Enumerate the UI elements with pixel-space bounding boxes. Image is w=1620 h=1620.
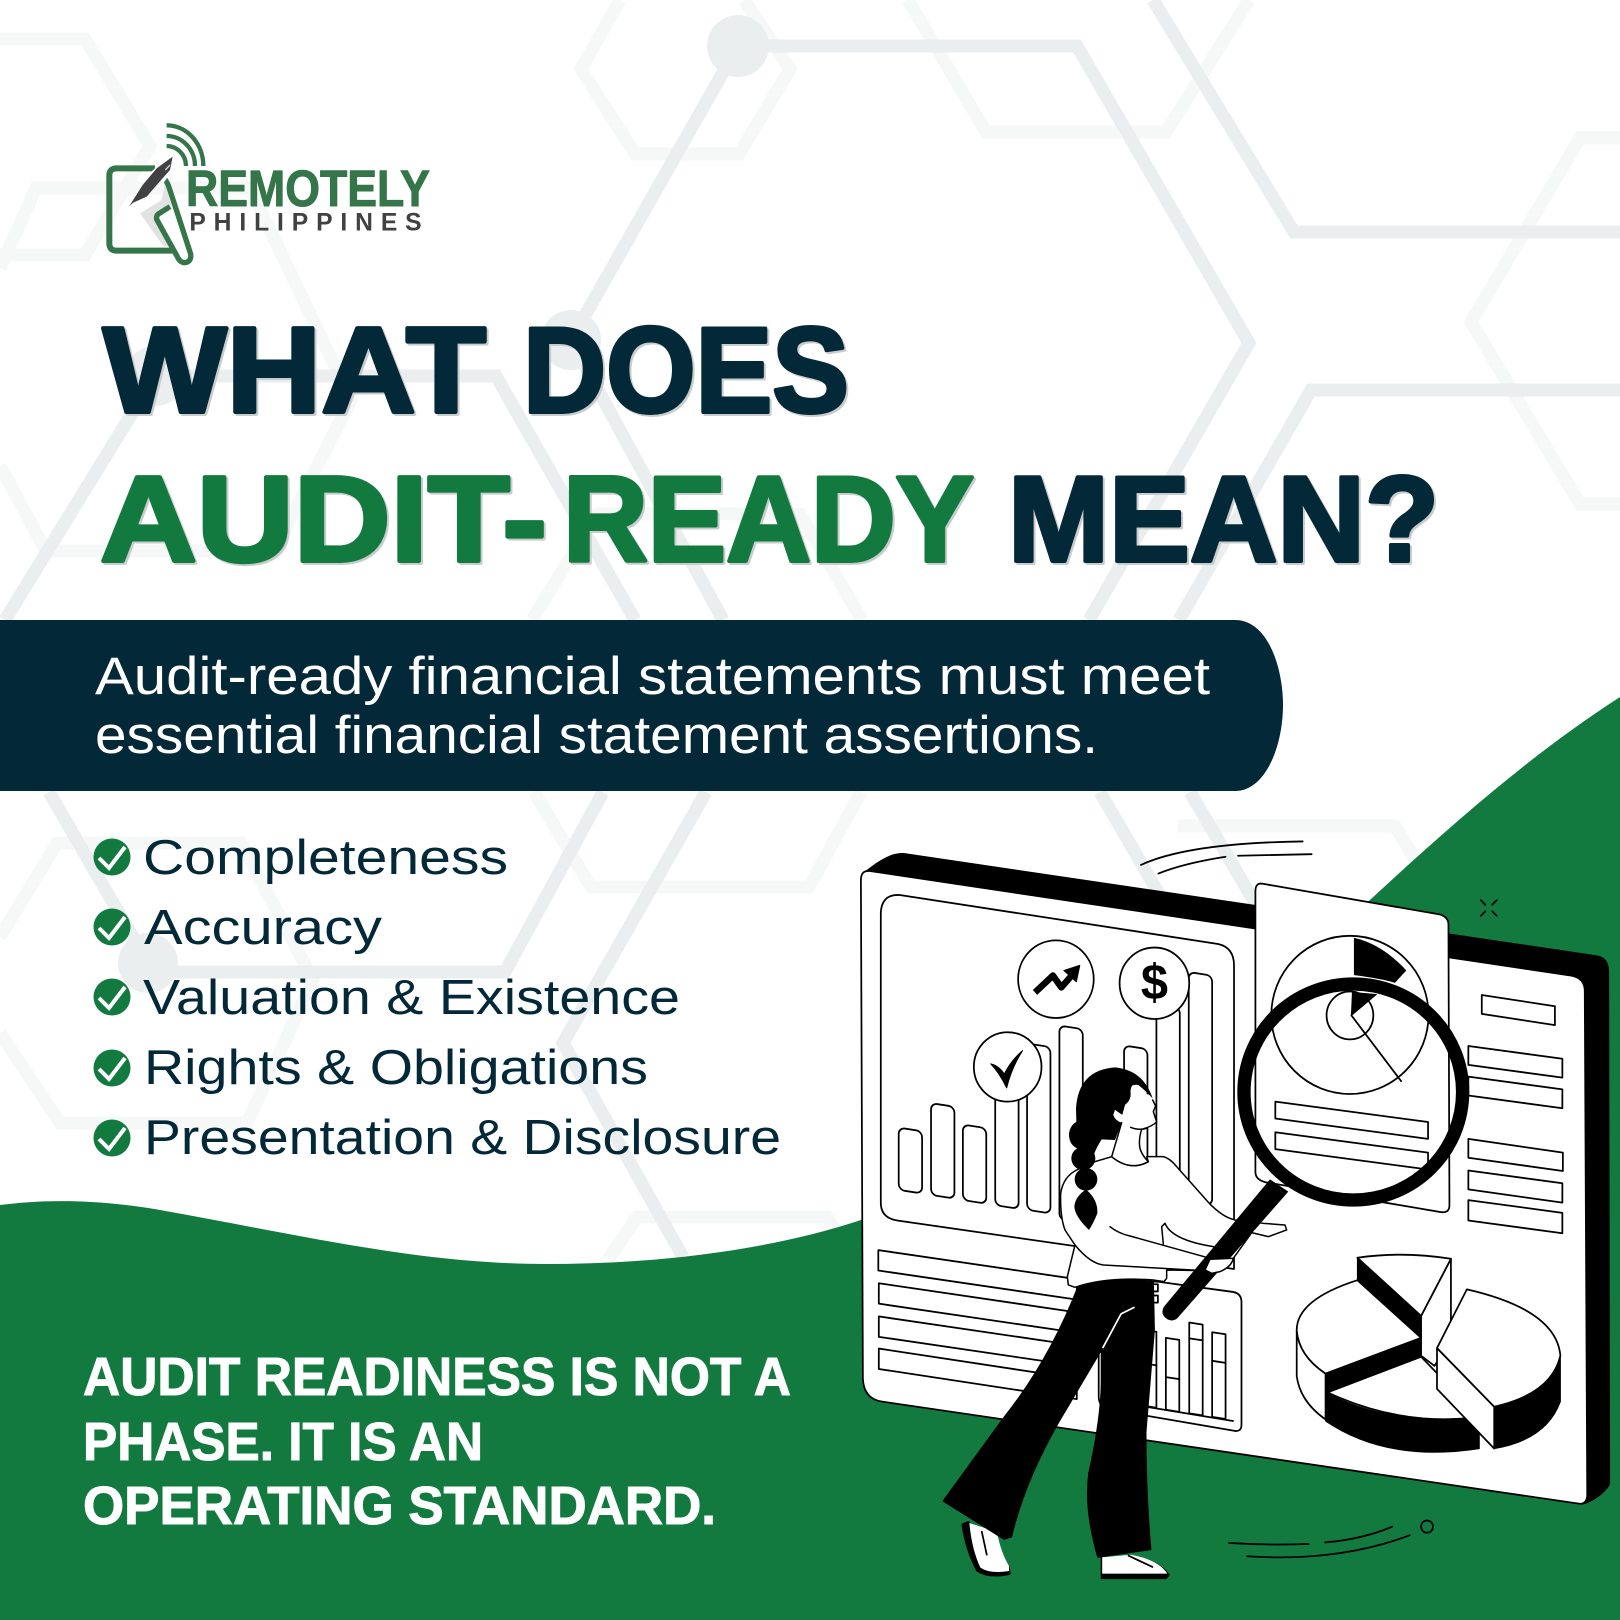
item: Presentation & Disclosure: Presentation & Disclosure — [144, 1111, 781, 1165]
logo: Remotely Philippines: PHILIPPINES — [189, 210, 422, 237]
icon: trend badge — [1018, 940, 1094, 1018]
dashboard board — [861, 853, 1610, 1505]
shoes — [962, 1522, 1169, 1579]
illustration: woman inspecting dashboard with magnifier — [861, 841, 1610, 1579]
item: Completeness: Completeness — [143, 831, 508, 885]
closing statement: AUDIT READINESS IS NOT A — [83, 1347, 791, 1407]
closing statement — [83, 1347, 791, 1536]
title: DOES — [523, 302, 849, 438]
item: Accuracy — [94, 901, 383, 955]
3D pie chart — [1297, 1255, 1560, 1452]
icon: dollar badge — [1120, 948, 1189, 1019]
title: WHAT — [103, 302, 486, 438]
title: AUDIT- — [100, 451, 547, 587]
closing statement: PHASE. IT IS AN — [83, 1412, 483, 1472]
magnifying glass — [1162, 984, 1463, 1320]
green wave and hill background — [0, 697, 1620, 1620]
item: Accuracy: Accuracy — [144, 901, 383, 955]
item: Valuation & Existence: Valuation & Existence — [143, 971, 680, 1025]
small stacked bar panel — [1099, 1279, 1241, 1431]
background hexagon pattern — [0, 0, 1620, 1270]
closing statement: OPERATING STANDARD. — [83, 1476, 716, 1536]
hair and braid — [1069, 1067, 1153, 1230]
title: READY — [563, 451, 974, 587]
item: Rights & Obligations: Rights & Obligations — [144, 1041, 648, 1095]
banner: audit-ready statement: Audit-ready financial statements must meet — [95, 647, 1210, 706]
logo: Remotely Philippines — [109, 125, 430, 263]
banner: audit-ready statement — [0, 620, 1283, 791]
banner: audit-ready statement: essential financial statement assertions. — [95, 706, 1098, 765]
trousers — [943, 1279, 1154, 1557]
dashboard and charts — [861, 841, 1610, 1579]
text rows on board — [878, 995, 1563, 1399]
report card with radial chart — [1255, 884, 1449, 1212]
sweater — [1061, 1157, 1287, 1287]
face and neck — [1112, 1085, 1157, 1166]
icon: dollar badge: $ — [1141, 955, 1168, 1011]
motion lines and sparkles — [1141, 841, 1497, 1557]
title — [100, 302, 1439, 587]
checklist of assertions — [94, 831, 781, 1165]
logo: Remotely Philippines: REMOTELY — [186, 160, 430, 217]
woman upper body and magnifier — [1061, 984, 1463, 1320]
icon: check badge — [974, 1032, 1041, 1102]
title: MEAN? — [1008, 451, 1439, 587]
bar chart panel — [881, 895, 1234, 1269]
